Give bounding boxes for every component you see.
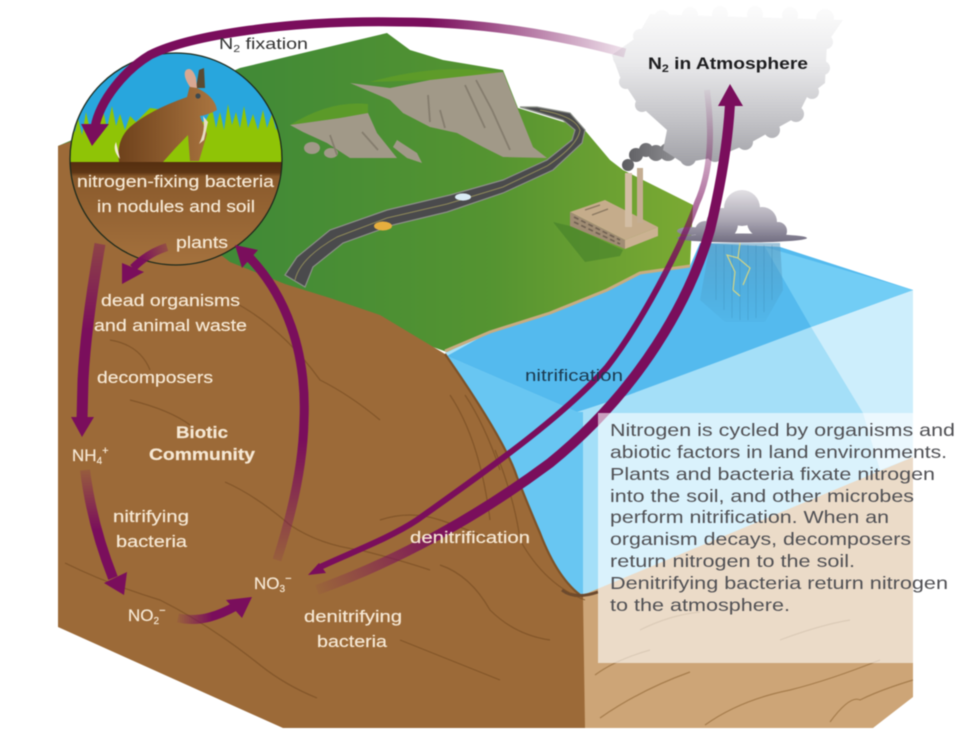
arrow: plants to dead organisms <box>122 247 167 284</box>
text block: explanation: Nitrogen is cycled by organisms and <box>610 420 955 440</box>
label: NO2-: NO <box>128 606 154 625</box>
label: dead organisms and animal waste <box>94 291 247 335</box>
label: nitrogen-fixing bacteria: in nodules and soil <box>97 197 255 216</box>
label: denitrifying bacteria: bacteria <box>317 632 388 651</box>
rock outcrop small <box>290 113 422 163</box>
label: nitrogen-fixing bacteria <box>77 172 275 216</box>
text block: explanation: into the soil, and other microbes <box>610 486 914 506</box>
lake bed rim <box>445 354 583 597</box>
text block: explanation <box>610 420 955 615</box>
text block: explanation: Plants and bacteria fixate nitrogen <box>610 464 935 484</box>
label: nitrogen-fixing bacteria: nitrogen-fixing bacteria <box>77 172 275 191</box>
label: denitrifying bacteria: denitrifying <box>304 607 402 626</box>
rabbit ear back <box>196 68 205 88</box>
label: plants: plants <box>176 233 228 252</box>
atmosphere cloud <box>612 6 843 166</box>
heading: N2 fixation: N <box>219 36 231 53</box>
label: NH4+: NH <box>72 446 97 465</box>
heading: N2 in Atmosphere: 2 <box>662 63 669 75</box>
shoreline <box>445 266 690 351</box>
arrow: NO3 to plants <box>235 245 304 560</box>
text block: explanation: organism decays, decomposers <box>610 529 911 549</box>
label: NO2-: 2 <box>154 616 160 627</box>
green hillside <box>58 33 693 352</box>
arrow: plants to NH4 <box>71 244 100 437</box>
label: nitrifying bacteria: bacteria <box>116 532 188 551</box>
label: Biotic Community: Biotic <box>176 423 228 442</box>
label: NO2-: − <box>159 605 166 617</box>
arrow: denitrification to atmosphere <box>317 84 743 590</box>
circle outline <box>70 53 282 265</box>
water body <box>445 243 913 595</box>
label: denitrifying bacteria <box>304 607 402 651</box>
label: NH4+: + <box>102 445 109 457</box>
car yellow <box>374 222 392 230</box>
lightning <box>727 243 750 296</box>
label: nitrification: nitrification <box>525 366 623 385</box>
text block: explanation: to the atmosphere. <box>610 595 790 615</box>
arrow: NO2 to NO3 <box>178 597 252 620</box>
factory <box>553 168 658 262</box>
sky <box>74 52 278 135</box>
text block: explanation: Denitrifying bacteria return nitrogen <box>610 573 948 593</box>
grass <box>70 104 282 162</box>
rim bottom of lake <box>562 590 598 596</box>
green ridge highlight <box>290 69 503 125</box>
rain <box>700 243 783 322</box>
arrow: N2 fixation <box>81 22 625 146</box>
smoke from stacks <box>622 143 677 171</box>
rock strata lines in front soil face <box>595 612 913 725</box>
label: nitrifying bacteria: nitrifying <box>113 507 189 526</box>
label: NO3-: NO <box>254 574 280 593</box>
water left shallow <box>447 356 583 595</box>
water surface, light patch <box>765 247 913 327</box>
text block: explanation: perform nitrification. When an <box>610 507 889 527</box>
storm cloud <box>677 190 807 242</box>
water surface, deep <box>447 243 913 412</box>
soil <box>70 162 282 266</box>
label: decomposers: decomposers <box>97 368 213 387</box>
text panel background <box>598 413 914 663</box>
rabbit ear front <box>185 69 197 88</box>
heading: N2 in Atmosphere: N <box>648 54 660 73</box>
road <box>285 107 585 287</box>
text block: explanation: abiotic factors in land environments. <box>610 442 947 462</box>
rabbit habitat circle <box>70 53 282 266</box>
heading: N2 in Atmosphere: in Atmosphere <box>669 54 808 73</box>
pale water at right <box>811 290 913 470</box>
label: NH4+: 4 <box>97 456 103 467</box>
label: dead organisms and animal waste: dead organisms <box>101 291 240 310</box>
label: Biotic Community <box>149 423 256 464</box>
label: nitrifying bacteria <box>113 507 189 551</box>
arrow: NH4 to NO2 <box>85 470 127 595</box>
brown soil cross-section <box>58 140 585 728</box>
label: NO3-: 3 <box>280 584 286 595</box>
rock outcrop large <box>350 72 547 158</box>
front soil face <box>583 457 913 728</box>
heading: N2 fixation: fixation <box>240 36 308 53</box>
car white <box>455 193 471 201</box>
label: dead organisms and animal waste: and animal waste <box>94 316 247 335</box>
rabbit eye <box>195 93 201 99</box>
label: Biotic Community: Community <box>149 445 256 464</box>
rabbit <box>115 68 217 162</box>
heading: N2 fixation: 2 <box>233 44 241 55</box>
rabbit chest <box>199 116 208 144</box>
label: NO3-: − <box>285 573 292 585</box>
rabbit tail <box>115 142 120 159</box>
soil strata lines <box>65 300 585 698</box>
text block: explanation: return nitrogen to the soil. <box>610 551 855 571</box>
arrow: nitrification to NO3 <box>308 90 710 575</box>
label: denitrification: denitrification <box>410 528 530 547</box>
